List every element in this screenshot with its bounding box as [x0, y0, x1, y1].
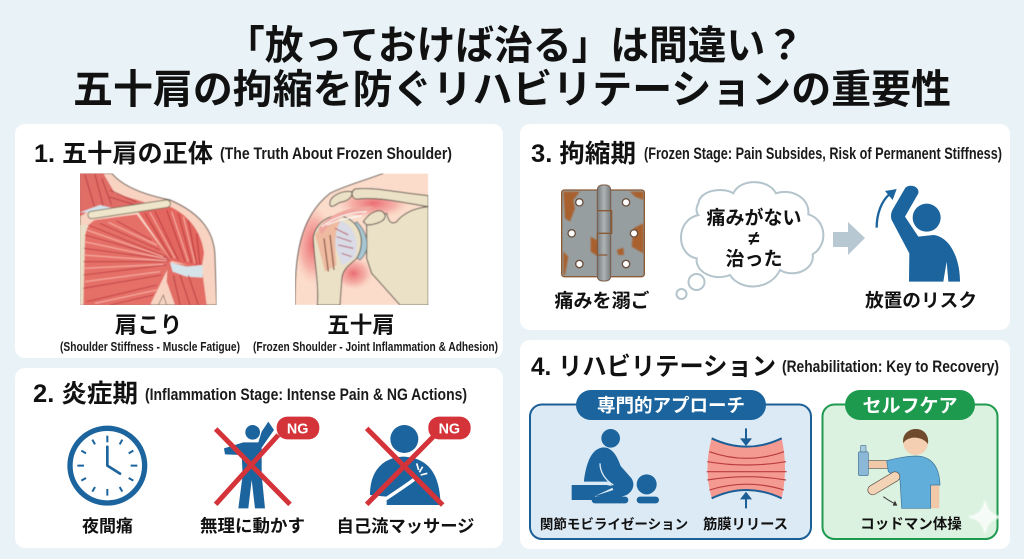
icon: self massage NG: NG: [439, 422, 460, 438]
heading 1: 1. 五十肩の正体: [34, 140, 213, 168]
box: professional approach: [530, 390, 811, 539]
title: [73, 24, 951, 112]
icon: self massage NG: [367, 417, 471, 505]
heading 2: [33, 380, 467, 408]
title: 「放っておけば治る」は間違い？: [226, 24, 804, 68]
panel: 2 inflammation stage: [15, 368, 503, 548]
box: self care: [822, 390, 998, 539]
panel: 4 rehabilitation: [520, 340, 1010, 549]
label: joint mobilization: 関節モビライゼーション: [540, 516, 688, 532]
icon: codman exercise: [858, 429, 940, 508]
label: frozen shoulder: [253, 313, 498, 354]
label: frozen shoulder: 五十肩: [327, 313, 395, 338]
heading 1: [34, 140, 452, 168]
icon: forced movement NG: NG: [287, 422, 308, 438]
label: hinge: 痛みを溺ご: [554, 289, 650, 312]
icon: person raising arm: [877, 186, 960, 282]
label: shoulder stiffness: 肩こり: [115, 313, 182, 338]
icon: joint mobilization: [572, 429, 659, 503]
label: shoulder stiffness: [60, 313, 240, 354]
box: professional approach: 専門的アプローチ: [597, 395, 745, 416]
label: night pain: 夜間痛: [82, 516, 133, 536]
heading 3: [531, 140, 1002, 168]
title: 五十肩の拘縮を防ぐリハビリテーションの重要性: [73, 68, 951, 112]
label: fascia release: 筋膜リリース: [703, 515, 788, 533]
label: risk of neglect: 放置のリスク: [865, 290, 977, 311]
panel: 3 frozen stage: [520, 124, 1010, 330]
thought bubble: 痛みがない: [706, 206, 802, 229]
icon: sparkle watermark: [969, 501, 1001, 533]
label: forced movement: 無理に動かす: [200, 516, 305, 536]
panel: 1 truth about frozen shoulder: [15, 124, 503, 358]
heading 4: [531, 353, 999, 381]
heading 2: (Inflammation Stage: Intense Pain & NG Actions): [145, 385, 467, 404]
icon: rusty hinge: [562, 185, 644, 281]
arrow: [833, 222, 865, 255]
icon: fascia release: [707, 428, 787, 508]
thought bubble: ≠: [749, 228, 760, 250]
heading 2: 2. 炎症期: [33, 380, 138, 408]
heading 1: (The Truth About Frozen Shoulder): [220, 144, 452, 163]
icon: forced movement NG: [216, 417, 319, 508]
thought bubble: [676, 182, 823, 299]
heading 3: 3. 拘縮期: [531, 140, 636, 168]
thought bubble: 治った: [725, 248, 783, 270]
label: frozen shoulder: (Frozen Shoulder - Joint Inflammation & Adhesion): [253, 340, 498, 354]
heading 4: 4. リハビリテーション: [531, 353, 776, 381]
illustration: shoulder muscles: [80, 173, 217, 305]
box: self care: セルフケア: [862, 395, 958, 417]
label: codman exercise: コッドマン体操: [860, 515, 962, 533]
icon: clock: [70, 428, 145, 503]
label: shoulder stiffness: (Shoulder Stiffness - Muscle Fatigue): [60, 340, 240, 354]
label: self massage: 自己流マッサージ: [337, 516, 474, 536]
illustration: frozen shoulder joint: [293, 173, 428, 305]
